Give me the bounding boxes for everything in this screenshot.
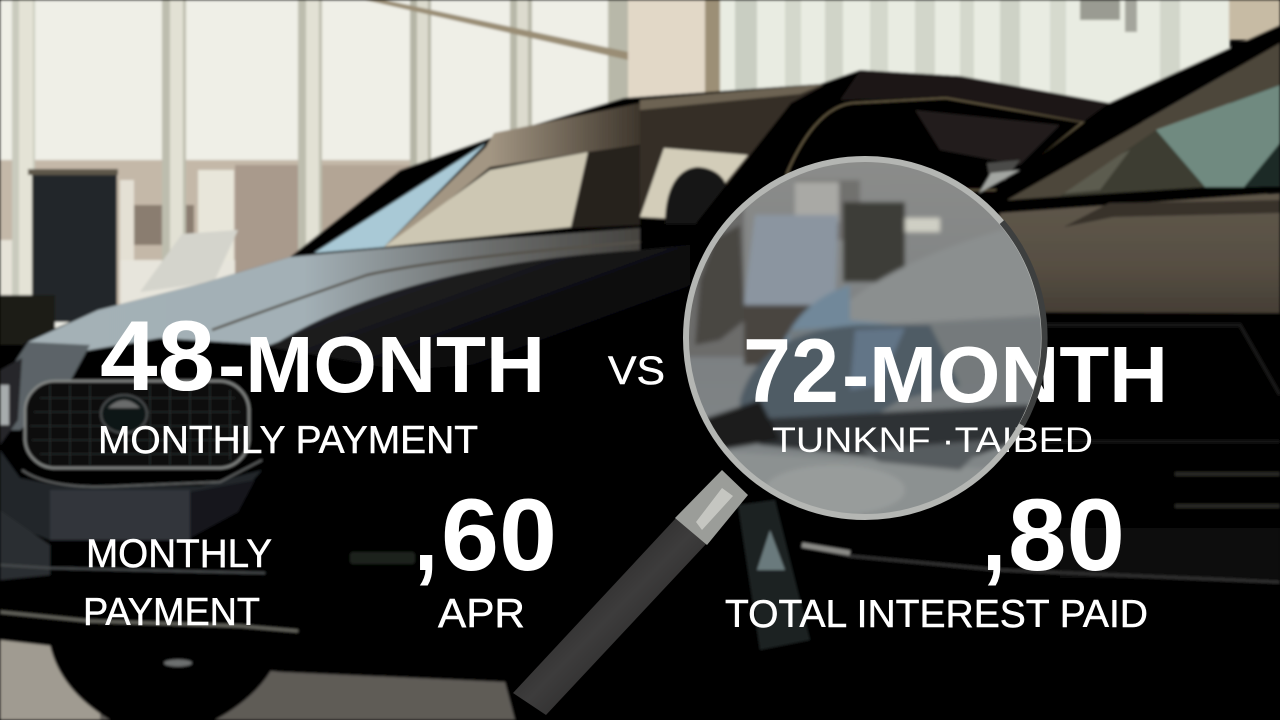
- label: monthly payment heading: MONTHLY PAYMENT: [98, 419, 478, 462]
- magnifying glass rim: [686, 159, 1045, 517]
- emblem: [101, 395, 147, 433]
- right wall and column: [628, 0, 706, 130]
- paper reflection: [744, 215, 838, 305]
- grille: [25, 381, 249, 468]
- floor: [0, 640, 100, 720]
- car badge: [350, 552, 415, 564]
- wiper shine: [979, 170, 1020, 193]
- headlight: [0, 358, 22, 445]
- stat: 80 value: ,: [982, 480, 1006, 592]
- handle ferrule: [675, 470, 748, 545]
- sign on stand: [140, 230, 238, 292]
- right car lower: [1000, 316, 1280, 720]
- stat: monthly payment label: MONTHLY: [86, 532, 272, 576]
- right car windshield: [1007, 130, 1205, 200]
- stat: monthly payment label: [83, 532, 272, 634]
- stat: 80 value: 80: [1008, 478, 1125, 592]
- showroom windows: [0, 0, 1280, 340]
- magnifying glass lens: [689, 162, 1041, 514]
- hood reflection: [850, 249, 1039, 324]
- windshield interior: [384, 152, 588, 247]
- stat: monthly payment label: PAYMENT: [83, 591, 260, 634]
- green window: [1156, 85, 1280, 187]
- side window: [640, 148, 748, 220]
- front fascia: [0, 450, 262, 540]
- vs label: VS: [608, 349, 665, 393]
- heading: 72-month: [743, 321, 1168, 422]
- right car pillar band: [1007, 43, 1280, 200]
- heading: 48-month: -MONTH: [218, 320, 545, 409]
- striped right windows: [720, 0, 1230, 140]
- stat: 60 value: 60: [441, 478, 557, 592]
- dark display stand: [32, 172, 117, 322]
- heading: 48-month: [100, 300, 545, 411]
- car reflection: [740, 325, 960, 430]
- heading: 72-month: 72: [743, 321, 839, 422]
- heading: 72-month: -MONTH: [842, 330, 1168, 419]
- front wheel: [50, 645, 282, 720]
- roof tan band: [384, 103, 640, 247]
- right car A-pillar: [987, 25, 1280, 200]
- seat: [665, 167, 726, 224]
- right hood: [1000, 193, 1280, 313]
- magnifying glass handle: [513, 470, 748, 715]
- stat: apr label: APR: [438, 590, 525, 636]
- heading: 48-month: 48: [100, 300, 215, 411]
- stat: total interest paid label: TOTAL INTEREST PAID: [725, 593, 1148, 636]
- left hood: [28, 228, 640, 360]
- hood crease: [212, 242, 640, 330]
- handle grip: [513, 518, 707, 715]
- glass shard: [738, 500, 810, 650]
- magnified garbled label: TUNKNF ·TAIBED: [772, 421, 1093, 460]
- windshield glass: [314, 143, 486, 253]
- stat: 60 value: ,: [414, 480, 438, 592]
- black pillar and door frame: [690, 85, 852, 240]
